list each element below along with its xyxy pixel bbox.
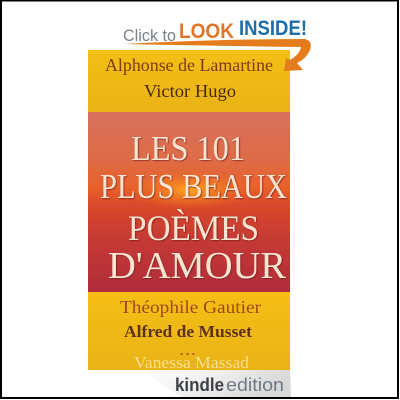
ellipsis: ...: [180, 343, 195, 358]
page curl: [144, 370, 291, 397]
title: D'AMOUR: [108, 245, 287, 287]
title: LES 101: [131, 129, 245, 168]
kindle edition label: [175, 375, 284, 395]
panel: sunset image: [88, 112, 290, 292]
author: Victor Hugo: Victor Hugo: [144, 81, 236, 101]
author: Vanessa Massad: Vanessa Massad: [134, 353, 250, 372]
kindle edition label: edition: [226, 375, 284, 395]
title: PLUS BEAUX: [100, 167, 287, 206]
arrow: [124, 39, 311, 71]
book cover: [88, 50, 290, 372]
title: [100, 129, 287, 287]
LOOK: LOOK: [179, 20, 234, 43]
author: Alfred de Musset: Alfred de Musset: [124, 322, 252, 341]
panel: bottom yellow band: [88, 292, 290, 370]
title: POÈMES: [128, 208, 259, 248]
click to look inside banner: [123, 17, 311, 71]
author: Alphonse de Lamartine: Alphonse de Lamartine: [105, 55, 273, 75]
INSIDE!: INSIDE!: [239, 17, 307, 40]
kindle edition label: kindle: [175, 375, 224, 395]
panel: top yellow band: [88, 50, 290, 112]
Click to: Click to: [123, 26, 176, 45]
author: Théophile Gautier: Théophile Gautier: [120, 297, 261, 317]
